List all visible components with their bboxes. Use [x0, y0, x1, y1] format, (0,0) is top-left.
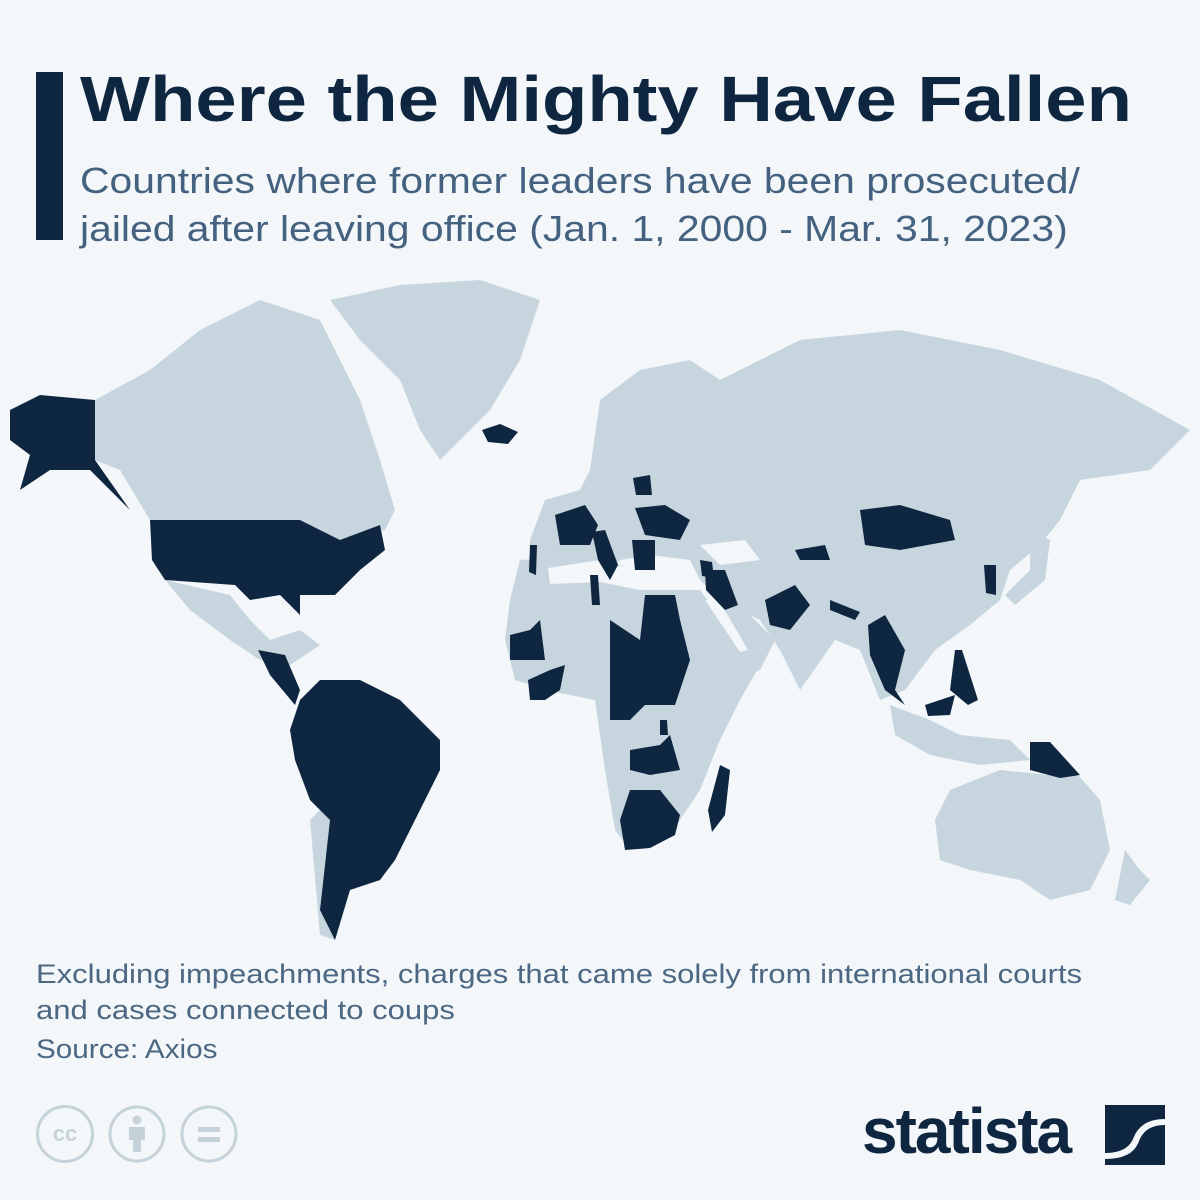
- Madagascar: [708, 765, 730, 832]
- Mexico: [165, 580, 320, 665]
- Canada: [95, 300, 395, 540]
- icon: no derivatives: [180, 1106, 238, 1162]
- Japan: [1005, 530, 1050, 605]
- Alaska: [10, 395, 130, 510]
- statista logo: statista: [862, 1095, 1070, 1167]
- Mongolia: [860, 505, 955, 550]
- Korea: [984, 565, 996, 595]
- Greenland: [330, 280, 540, 460]
- Mauritania: [510, 620, 545, 660]
- New Zealand: [1115, 850, 1150, 905]
- subtitle: jailed after leaving office (Jan. 1, 2000 - Mar. 31, 2023): [80, 208, 1068, 249]
- Myanmar/Thailand: [868, 615, 905, 705]
- statista logo: [862, 1095, 1165, 1167]
- Pakistan: [765, 585, 810, 630]
- source: Source: Axios: [36, 1034, 217, 1064]
- Nepal/Bangladesh: [830, 600, 860, 620]
- Kyrgyzstan: [795, 545, 830, 560]
- Europe + Asia: [530, 330, 1190, 700]
- Chad + Sudan + CAR: [610, 595, 690, 720]
- USA: [150, 520, 385, 615]
- Iraq: [705, 570, 738, 610]
- seas: [548, 540, 760, 652]
- icon: cc: [36, 1105, 94, 1163]
- Tunisia: [590, 575, 600, 605]
- icon: cc: cc: [53, 1121, 77, 1146]
- icon: attribution: [108, 1106, 166, 1162]
- Europe patches: [555, 505, 598, 545]
- South Africa: [620, 790, 680, 850]
- footnote: and cases connected to coups: [36, 995, 455, 1025]
- license icons: [36, 1105, 238, 1163]
- icon: statista mark: [1105, 1105, 1165, 1165]
- South America: [290, 680, 440, 940]
- footnote: [36, 959, 1082, 1025]
- Central America: [258, 650, 300, 705]
- Iceland: [482, 424, 518, 444]
- subtitle: Countries where former leaders have been prosecuted/: [80, 160, 1080, 201]
- subtitle: [79, 160, 1080, 249]
- title accent bar: [36, 72, 63, 240]
- Indonesia: [890, 705, 1030, 765]
- Chile strip / Uruguay: [310, 800, 335, 940]
- footnote: Excluding impeachments, charges that came solely from international courts: [36, 959, 1082, 989]
- Ivory coast: [528, 665, 565, 700]
- Philippines: [950, 650, 978, 705]
- Malaysia: [925, 695, 955, 716]
- Zambia/Zimbabwe/Malawi: [630, 735, 680, 775]
- Australia: [935, 760, 1110, 900]
- Arabia: [695, 600, 775, 690]
- title: Where the Mighty Have Fallen: [80, 63, 1132, 135]
- Africa: [505, 555, 760, 850]
- PNG: [1030, 742, 1080, 778]
